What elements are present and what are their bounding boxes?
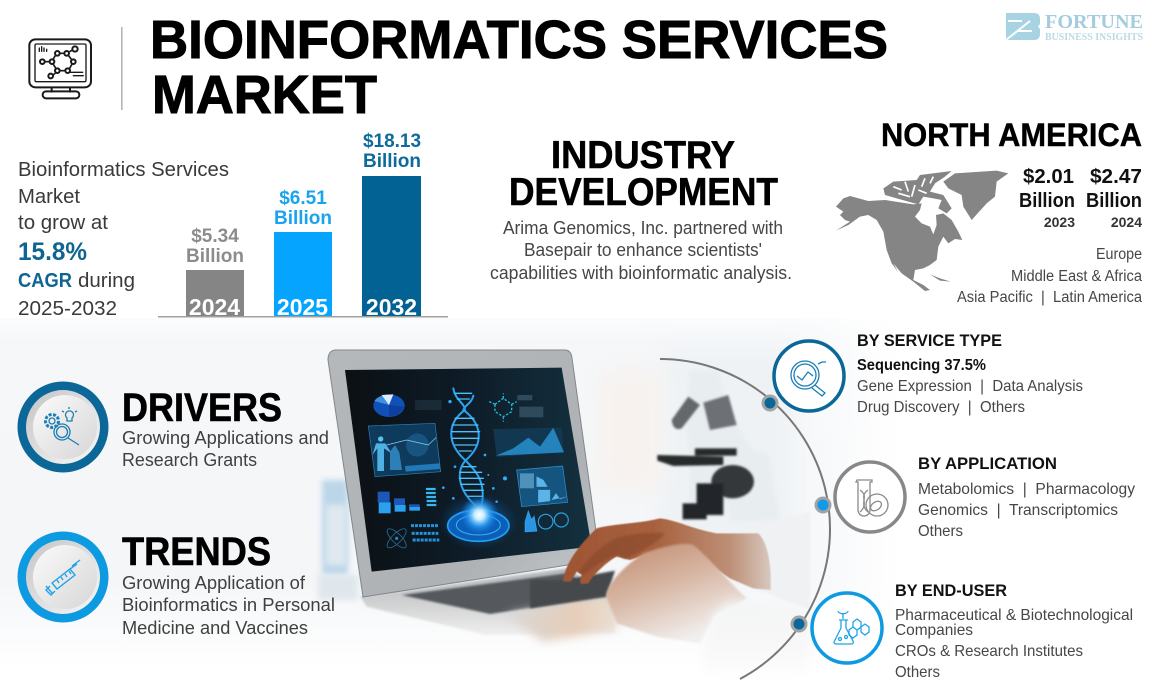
blurred text [415,395,543,417]
heading: BY SERVICE TYPE [857,331,1002,350]
heading [509,134,778,214]
2023 value: $2.01 [1023,166,1074,188]
panel: drivers [18,382,329,472]
health data panel [517,466,568,507]
panel: by end-user [812,581,1133,681]
heading: DRIVERS [122,386,282,430]
description [122,573,335,638]
heading: NORTH AMERICA [881,117,1142,153]
bar 2032: $18.13 [363,131,421,152]
shirt cuff [728,512,810,610]
items: Others [918,523,963,540]
icon: bioinformatics monitor [29,39,91,98]
text block: market growth CAGR: 2025-2032 [18,297,117,320]
body text: Arima Genomics, Inc. partnered with [503,218,783,238]
bar 2025 [274,188,332,320]
lower sleeve [702,602,810,680]
items [895,607,1133,681]
segment node: application [814,496,832,514]
molecule [489,393,517,422]
bar 2025: Billion [274,208,332,229]
description [122,428,329,470]
glowing platform [438,493,518,550]
description: Growing Application of [122,573,306,593]
2023 value [1019,166,1075,230]
background: laboratory scene [0,318,900,695]
bar 2025: 2025 [277,294,328,320]
sparkling particles [442,400,507,503]
logo: Fortune Business Insights [1006,11,1143,43]
panel: north america [836,117,1142,306]
microscope (blurred background object) [657,371,780,522]
front hand [606,544,747,643]
2023 value: Billion [1019,190,1075,212]
items [918,481,1135,540]
desk reflection [507,595,620,642]
segment node: end-user [790,616,808,632]
items: Gene Expression | Data Analysis [857,378,1083,395]
divider [121,27,123,110]
body scan panel [368,423,441,477]
text block: market growth CAGR: 15.8% [18,238,87,266]
items [857,357,1083,416]
2024 value: 2024 [1111,214,1142,230]
logo: Fortune Business Insights: FORTUNE [1045,11,1143,33]
items: Others [895,664,940,681]
text block: market growth CAGR: during [78,269,135,292]
items: Companies [895,622,973,639]
text block: market growth CAGR: to grow at [18,211,108,234]
items: CROs & Research Institutes [895,643,1083,660]
bar 2032: Billion [363,151,421,172]
finger shading [579,533,665,575]
body text: Basepair to enhance scientists' [524,240,762,260]
description: Growing Applications and [122,428,329,448]
segment node: service [762,394,778,412]
bar 2024 [186,226,244,320]
panel: by service type [774,331,1083,416]
text block: market growth CAGR: CAGR [18,269,72,292]
bar 2024: 2024 [189,294,240,320]
bar 2032 [362,131,421,320]
area chart [493,428,564,457]
keyboard detail [530,571,615,608]
body text: capabilities with bioinformatic analysis. [490,263,792,283]
heading: INDUSTRY [551,134,735,177]
bar 2025: $6.51 [279,188,327,209]
heading: TRENDS [122,530,271,574]
map: North America [836,171,1008,291]
back hand [563,518,771,590]
other regions [957,246,1142,306]
title: BIOINFORMATICS SERVICES [150,10,888,70]
2023 value: 2023 [1044,214,1075,230]
icon: test tube and pills [835,462,905,532]
items: Metabolomics | Pharmacology [918,481,1135,498]
panel: trends [18,530,335,638]
2024 value [1086,166,1142,230]
pie chart [373,394,405,417]
title [150,10,888,125]
small bars [378,489,436,513]
items: Pharmaceutical & Biotechnological [895,607,1133,624]
body text [490,218,792,283]
other regions: Europe [1096,246,1142,263]
gauges [525,512,568,532]
text block: market growth CAGR: Bioinformatics Services [18,158,229,181]
connector arc [660,359,830,679]
logo: Fortune Business Insights: BUSINESS INSIGHTS [1045,32,1143,43]
heading: BY END-USER [895,581,1007,600]
laptop base and keyboard [360,568,615,635]
atom and data rows [384,526,439,551]
icon: syringe [18,532,108,622]
2024 value: Billion [1086,190,1142,212]
description: Bioinformatics in Personal [122,595,335,615]
text block: market growth CAGR [18,158,229,320]
bar 2024: Billion [186,246,244,267]
icon: gears and magnifier [18,382,108,472]
bar chart: market size [158,131,448,320]
heading: DEVELOPMENT [509,171,778,214]
icon: flask and molecule [812,593,882,663]
heading: BY APPLICATION [918,454,1057,473]
bar 2024: $5.34 [191,226,239,247]
items: Genomics | Transcriptomics [918,502,1118,519]
bar 2032: 2032 [366,294,417,320]
hands on keyboard [507,512,810,680]
title: MARKET [152,65,377,125]
items: Drug Discovery | Others [857,399,1025,416]
laptop lid [328,350,600,597]
other regions: Middle East & Africa [1011,268,1142,285]
panel: industry development [490,134,792,283]
laptop screen [345,368,592,572]
DNA helix [451,388,484,505]
other regions: Asia Pacific | Latin America [957,289,1142,306]
items: Sequencing 37.5% [857,357,986,374]
laptop with DNA analysis dashboard [328,350,810,680]
text block: market growth CAGR: Market [18,185,80,208]
panel: by application [835,454,1135,540]
description: Medicine and Vaccines [122,618,308,638]
icon: magnifier with graph [774,341,844,411]
2024 value: $2.47 [1090,166,1142,188]
description: Research Grants [122,450,257,470]
